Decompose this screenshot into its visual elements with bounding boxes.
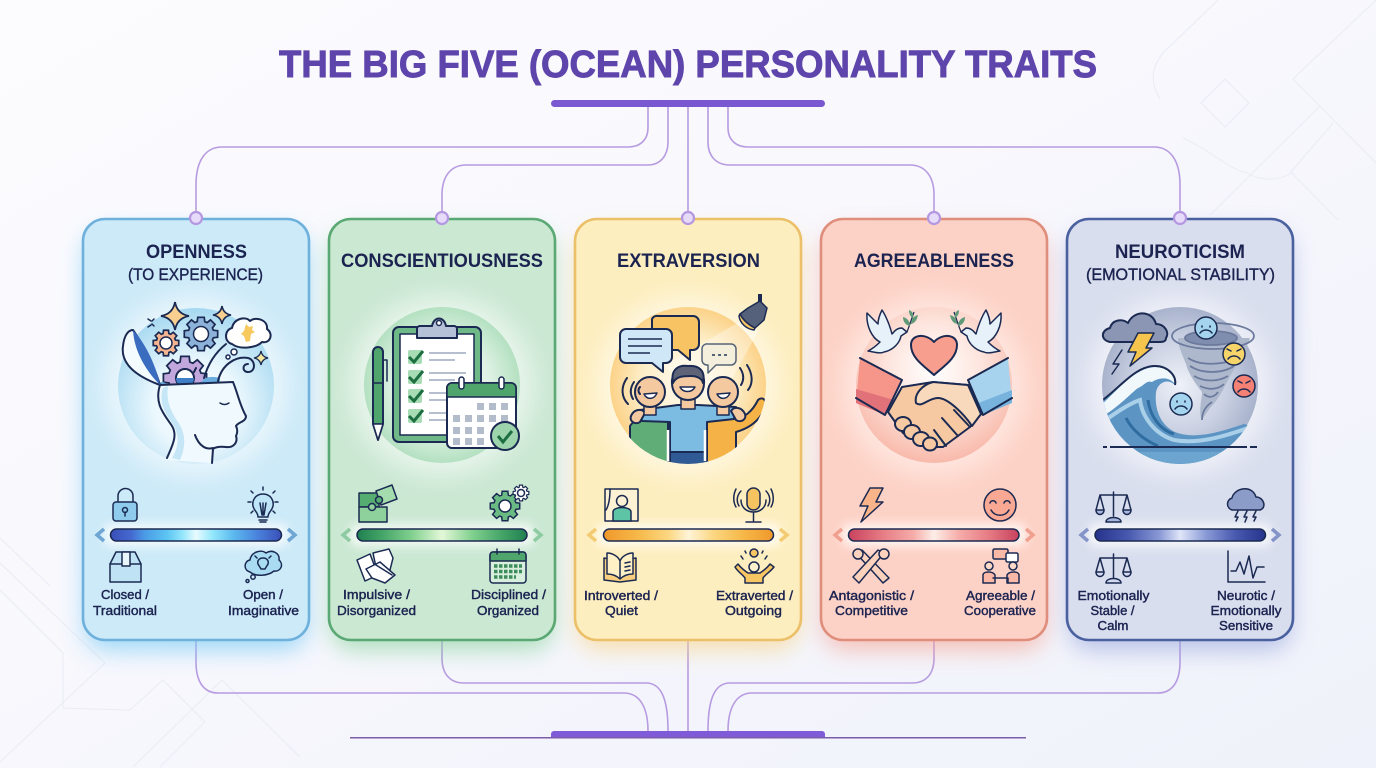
illustration: handshake, heart and doves [856,307,1012,463]
label: agreeable: Agreeable / [966,588,1035,603]
panel: extraversion [575,219,801,650]
icon: crossed arms [853,549,889,583]
panel: agreeableness [821,219,1047,650]
connector nodes [190,212,1186,224]
illustration: open mind [118,302,274,464]
icon: stable scale [1096,554,1131,583]
label: introverted: Introverted / [584,588,658,603]
label: impulsive: Impulsive / [343,587,410,602]
heading: CONSCIENTIOUSNESS [341,251,543,272]
label: neurotic: Sensitive [1219,618,1273,633]
icon: spotlight [739,294,767,330]
heading [128,242,263,284]
panel: openness [83,219,309,650]
label: extraverted [716,588,793,618]
label: open [228,587,299,618]
illustration: storm, tornado and wave [1100,307,1260,466]
top header bar [551,100,825,107]
icon: smiley [984,489,1016,521]
spectrum bar [835,524,1033,546]
heading: OPENNESS [146,242,247,263]
label: agreeable [964,588,1036,618]
heading [1086,242,1275,284]
label: antagonistic [829,588,914,618]
label: disciplined: Organized [477,603,539,618]
icon: tornado [1172,323,1254,420]
bottom bar [551,731,825,737]
label: introverted [584,588,658,618]
icon: person at window [605,489,638,521]
label: antagonistic: Antagonistic / [829,588,914,603]
icon: box [110,552,141,582]
label: agreeable: Cooperative [964,603,1036,618]
icon: thought cloud [245,551,281,582]
label: impulsive [337,587,416,618]
heading: EXTRAVERSION [617,251,760,272]
icon: erratic pulse chart [1228,551,1265,582]
label: extraverted: Extraverted / [716,588,793,603]
spectrum bar [97,524,295,546]
illustration: social group [610,294,767,466]
spectrum bar [343,524,541,546]
label: extraverted: Outgoing [725,603,782,618]
icon: storm cloud [1228,489,1264,522]
label: impulsive: Disorganized [337,603,416,618]
icon: puzzle [359,485,397,522]
icon: doves [867,310,1001,353]
icon: handshake [856,358,1012,450]
label: open: Imaginative [228,603,299,618]
label: neurotic: Neurotic / [1217,588,1275,603]
bottom rule [350,737,1026,738]
label: neurotic [1210,588,1282,633]
label: closed [93,587,157,618]
icon: open book [604,553,636,582]
icon: heart [911,336,957,375]
heading: (TO EXPERIENCE) [128,265,263,284]
icon: microphone [734,488,773,522]
icon: cheering people [735,549,774,583]
label: introverted: Quiet [605,603,638,618]
illustration: checklist and calendar [364,307,520,463]
spectrum bar [589,524,787,546]
label: neurotic: Emotionally [1210,603,1282,618]
panel: conscientiousness [329,219,555,650]
bottom connectors [196,640,1180,731]
label: emotionally stable [1078,588,1150,633]
icon: sad faces [1170,317,1255,415]
label: open: Open / [243,587,283,602]
top connectors [196,107,1180,218]
label: emotionally stable: Emotionally [1078,588,1150,603]
heading: NEUROTICISM [1115,242,1245,263]
heading: AGREEABLENESS [854,251,1014,272]
icon: lightning bolt [860,488,883,522]
icon: scattered papers [357,549,395,583]
icon: balance scale [1096,492,1131,522]
panel: neuroticism [1067,219,1293,650]
label: emotionally stable: Calm [1098,618,1128,633]
title: THE BIG FIVE (OCEAN) PERSONALITY TRAITS [279,44,1097,86]
heading: (EMOTIONAL STABILITY) [1086,265,1275,284]
icon: meeting [983,549,1019,583]
label: disciplined: Disciplined / [471,587,546,602]
icon: lock [113,489,137,521]
icon: lightbulb [248,487,278,522]
spectrum bar [1081,524,1279,546]
label: antagonistic: Competitive [835,603,908,618]
icon: organised calendar [490,549,526,583]
label: closed: Closed / [101,587,149,602]
icon: wave [1103,365,1248,464]
label: closed: Traditional [93,603,157,618]
label: disciplined [471,587,546,618]
icon: gears [490,485,529,521]
label: emotionally stable: Stable / [1090,603,1135,618]
